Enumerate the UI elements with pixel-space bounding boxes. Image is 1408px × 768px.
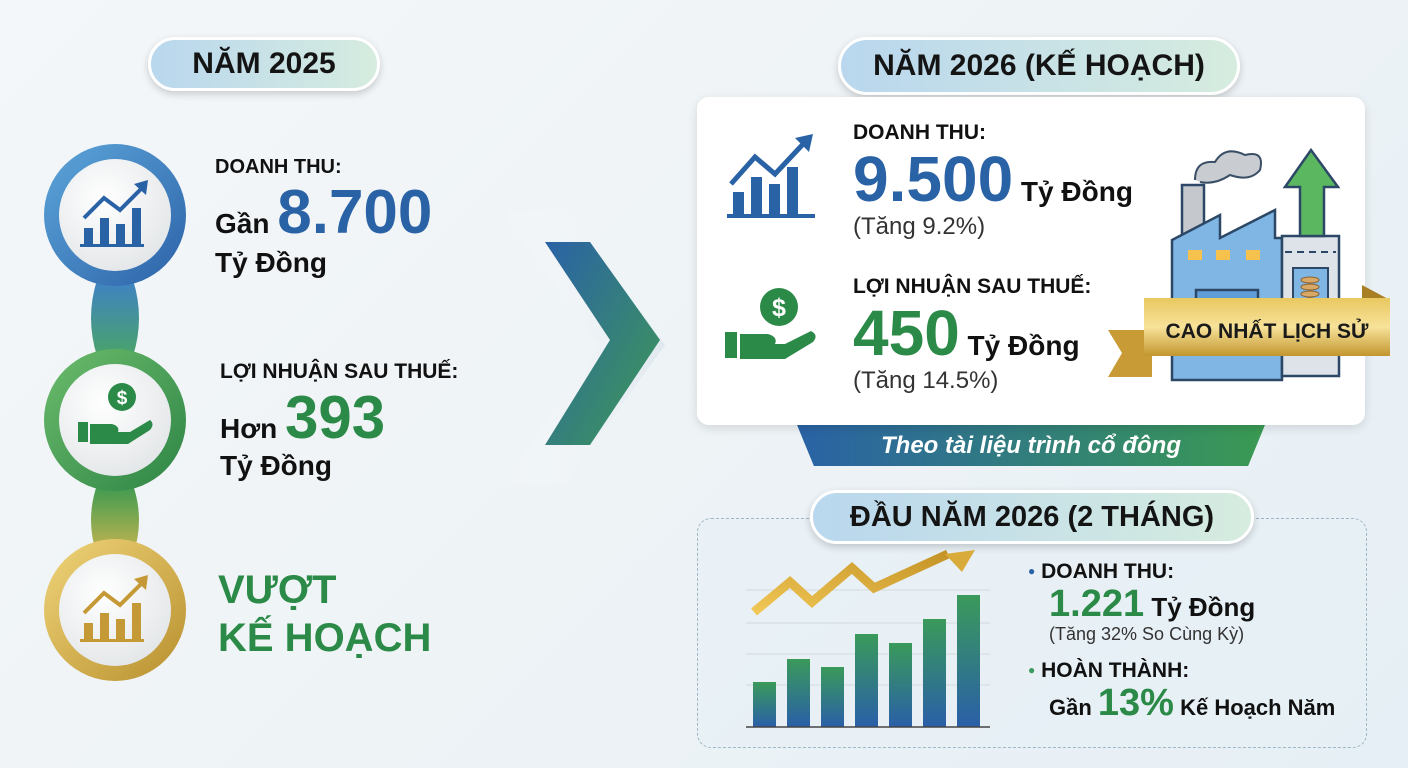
text: early 2026 stats: Gần 13% Kế Hoạch Năm [1049, 682, 1335, 724]
text: early 2026 stats: (Tăng 32% So Cùng Kỳ) [1049, 624, 1244, 644]
text: profit 2026: (Tăng 14.5%) [853, 367, 998, 394]
icon: profit hand [725, 288, 816, 359]
icon: revenue chart [727, 134, 815, 218]
text: 2025 revenue: DOANH THU: [215, 156, 342, 178]
text: revenue 2026 [853, 121, 1133, 240]
panel: 2026 plan card [697, 97, 1365, 425]
text: early 2026 stats: 1.221 Tỷ Đồng [1049, 583, 1255, 625]
text: early 2026 stats: ● HOÀN THÀNH: [1028, 659, 1189, 682]
title: Năm 2025: NĂM 2025 [192, 47, 336, 80]
text: 2025 revenue: Gần 8.700 [215, 178, 432, 247]
panel: early 2026 dashed box [697, 518, 1367, 748]
text: early 2026 stats: ● DOANH THU: [1028, 560, 1174, 583]
title: Năm 2025 [148, 37, 380, 91]
connector 1 [91, 280, 139, 356]
icon: blue revenue circle [44, 144, 186, 286]
text: early 2026 stats [1028, 560, 1335, 724]
bar chart with arrow [746, 550, 990, 728]
title: Năm 2026 kế hoạch [838, 37, 1240, 95]
text: 2025 profit: Hơn 393 [220, 384, 385, 451]
text: revenue 2026: (Tăng 9.2%) [853, 213, 985, 240]
banner: theo tài liệu: Theo tài liệu trình cổ đông [881, 432, 1181, 459]
text: profit 2026 [853, 274, 1091, 394]
text: vượt kế hoạch [218, 568, 431, 660]
text: revenue 2026: DOANH THU: [853, 121, 986, 144]
text: 2025 revenue [215, 156, 432, 278]
text: profit 2026: 450 Tỷ Đồng [853, 297, 1080, 369]
text: revenue 2026: 9.500 Tỷ Đồng [853, 143, 1133, 215]
title: đầu năm 2026 [810, 490, 1254, 544]
text: 2025 revenue: Tỷ Đồng [215, 247, 327, 278]
text: vượt kế hoạch: KẾ HOẠCH [218, 616, 431, 660]
icon: green profit circle: $ [117, 388, 128, 409]
ribbon [1108, 285, 1390, 377]
connector 2 [91, 485, 139, 555]
text: 2025 profit: Tỷ Đồng [220, 450, 332, 481]
icon: factory with ribbon [1108, 148, 1390, 382]
title: đầu năm 2026: ĐẦU NĂM 2026 (2 THÁNG) [850, 501, 1214, 533]
text: 2025 profit: LỢI NHUẬN SAU THUẾ: [220, 360, 458, 383]
timeline circles [44, 144, 186, 681]
icon: gold circle [44, 539, 186, 681]
text: 2025 profit [220, 358, 458, 481]
icon: green profit circle [44, 349, 186, 491]
text: profit 2026: LỢI NHUẬN SAU THUẾ: [853, 275, 1091, 298]
icon: profit hand: $ [772, 294, 786, 322]
title: Năm 2026 kế hoạch: NĂM 2026 (KẾ HOẠCH) [873, 49, 1205, 82]
text: vượt kế hoạch: VƯỢT [218, 568, 336, 612]
ribbon: CAO NHẤT LỊCH SỬ [1166, 319, 1369, 343]
arrow: chevron [545, 242, 665, 445]
banner: theo tài liệu [797, 425, 1265, 466]
